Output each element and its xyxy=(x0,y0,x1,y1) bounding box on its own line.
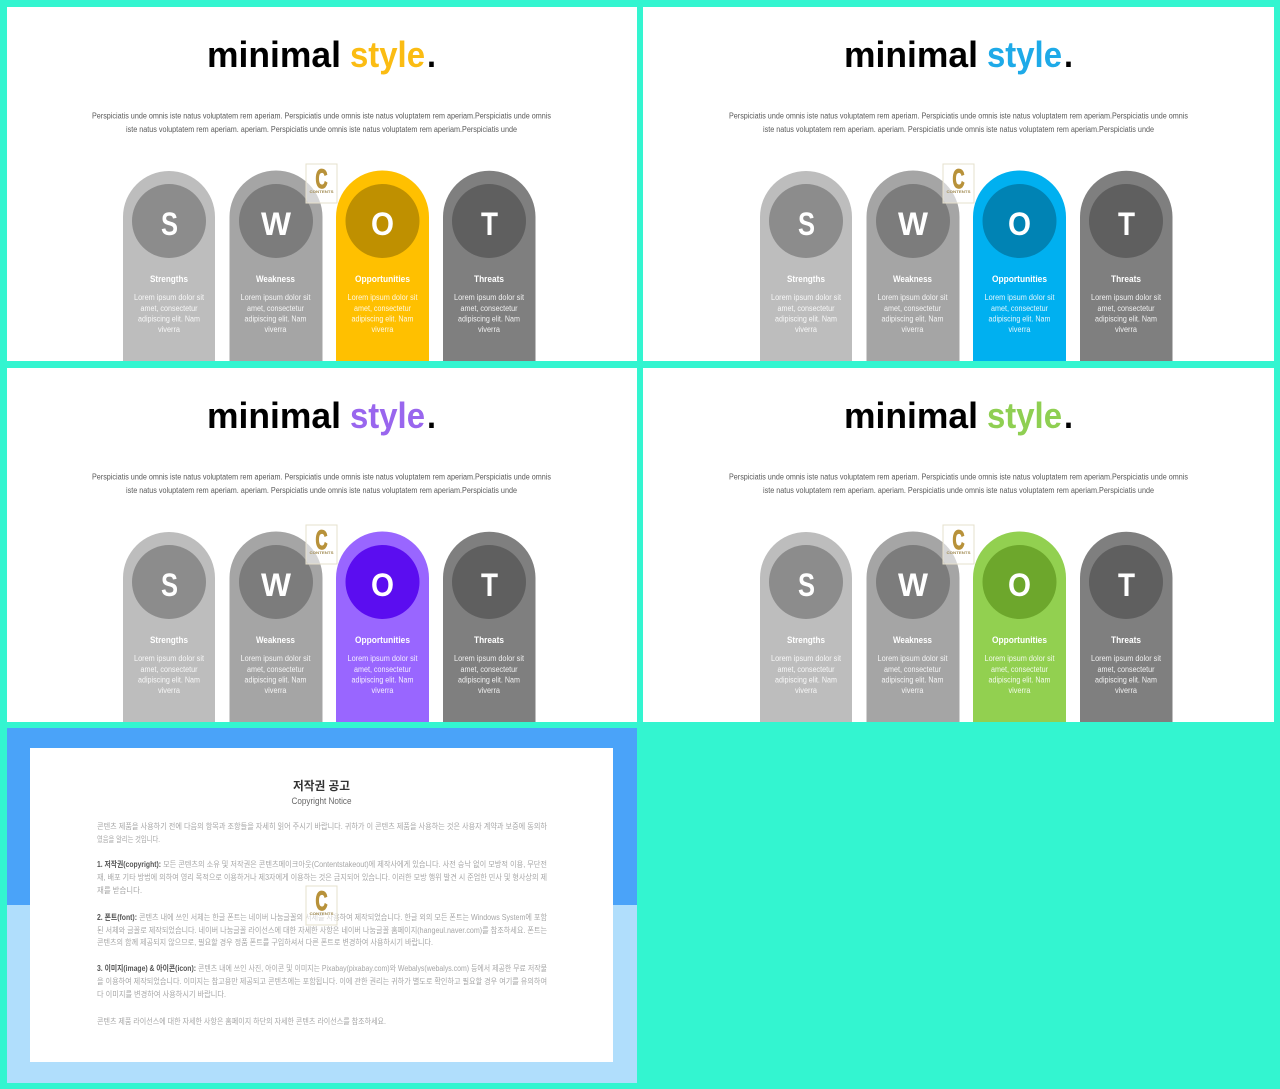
card: Opportunities: Lorem ipsum dolor sit xyxy=(348,293,418,302)
card: Opportunities xyxy=(336,532,429,722)
title: . xyxy=(427,34,436,75)
card: Weakness: W xyxy=(261,567,292,603)
card: Strengths: S xyxy=(161,206,178,242)
card: Opportunities: amet, consectetur xyxy=(354,304,411,313)
card: Opportunities: Lorem ipsum dolor sit xyxy=(984,654,1055,663)
card: Strengths: viverra xyxy=(158,686,180,695)
panel: yellow SWOT slide xyxy=(7,7,637,361)
watermark logo: C xyxy=(316,886,328,916)
text block: introduction: 콘텐츠 제품을 사용하기 전에 다음의 항목과 조항들을 자세히 읽어 주시기 바랍니다. 귀하가 이 콘텐츠 제품을 사용하는 것은 사용자 계약과 보증에 동의하 xyxy=(97,821,548,831)
card: Weakness: Lorem ipsum dolor sit xyxy=(240,654,311,663)
card: Threats: Lorem ipsum dolor sit xyxy=(454,654,525,663)
card: Strengths: Lorem ipsum dolor sit xyxy=(771,654,842,663)
card: Opportunities: viverra xyxy=(1008,325,1031,334)
text block: copyright clause: 재, 배포 기타 방법에 의하여 영리 목적으로 이용하거나 제3자에게 이용하는 것은 금지되어 있습니다. 이러한 모방 행위 발견 시 준엄한 민사 및 형사상의 제 xyxy=(97,872,547,882)
text block: image and icon clause: 을 이용하여 제작되었습니다. 이미지는 참고용만 제공되고 콘텐츠에는 포함됩니다. 이에 관한 권리는 귀하가 별도로 확인하고 필요할 경우 여기를 유의하여 xyxy=(97,976,547,986)
card: Opportunities: Opportunities xyxy=(355,274,410,284)
card: Weakness: W xyxy=(898,567,929,603)
text block: introduction xyxy=(97,821,548,844)
card: Strengths xyxy=(760,532,852,722)
card: Strengths: amet, consectetur xyxy=(778,304,835,313)
intro text: iste natus voluptatem rem aperiam. aperiam. Perspiciatis unde omnis iste natus voluptatem rem aperiam.Perspiciatis unde xyxy=(763,486,1154,495)
card: Strengths: S xyxy=(798,206,815,242)
panel: blue SWOT slide xyxy=(643,7,1274,361)
intro text xyxy=(92,112,551,134)
card: Opportunities: Lorem ipsum dolor sit xyxy=(984,293,1055,302)
card: Weakness: Weakness xyxy=(893,274,932,284)
intro text xyxy=(729,472,1188,495)
card: Opportunities: O xyxy=(371,567,394,603)
title: . xyxy=(427,395,436,436)
title: . xyxy=(1064,34,1073,75)
text block: copyright clause: 모든 콘텐츠의 소유 및 저작권은 콘텐츠메이크아웃(Contentstakeout)에 제작사에게 있습니다. 사전 승낙 없이 모방적 이용, 무단전 xyxy=(163,859,547,869)
card: Weakness: viverra xyxy=(264,686,287,695)
panel: green SWOT slide xyxy=(643,368,1274,722)
card: Opportunities: amet, consectetur xyxy=(354,665,411,674)
card: Threats: T xyxy=(1118,206,1135,242)
card: Weakness: W xyxy=(261,206,292,242)
text block: license note: 콘텐츠 제품 라이선스에 대한 자세한 사항은 홈페이지 하단의 자세한 콘텐츠 라이선스를 참조하세요. xyxy=(97,1016,386,1026)
card: Strengths: Lorem ipsum dolor sit xyxy=(134,293,205,302)
card: Strengths: adipiscing elit. Nam xyxy=(775,676,837,684)
card: Strengths xyxy=(760,171,852,361)
card: Weakness: Weakness xyxy=(256,274,295,284)
card: Weakness xyxy=(866,532,960,722)
intro text xyxy=(92,472,551,495)
title: minimal xyxy=(207,395,341,436)
card: Threats: Threats xyxy=(1111,274,1141,284)
card: Threats: Threats xyxy=(1111,635,1141,645)
watermark logo xyxy=(306,525,337,564)
card: Weakness: adipiscing elit. Nam xyxy=(244,314,307,324)
watermark logo: CONTENTS xyxy=(946,550,971,555)
card: Strengths: viverra xyxy=(795,686,817,695)
card: Threats: Lorem ipsum dolor sit xyxy=(454,293,525,302)
heading: copyright notice xyxy=(292,778,352,806)
title: minimal xyxy=(207,34,341,75)
text block: font clause: 2. 폰트(font): xyxy=(97,913,137,922)
card: Opportunities: adipiscing elit. Nam xyxy=(352,314,414,324)
intro text: Perspiciatis unde omnis iste natus voluptatem rem aperiam. Perspiciatis unde omnis iste natus voluptatem rem aperiam.Perspiciatis unde omnis xyxy=(92,472,551,482)
title: minimal xyxy=(844,34,978,75)
watermark logo: CONTENTS xyxy=(946,189,971,194)
card: Weakness: adipiscing elit. Nam xyxy=(882,676,944,684)
text block: font clause xyxy=(97,912,548,947)
card: Strengths: amet, consectetur xyxy=(778,665,835,674)
card: Threats: viverra xyxy=(1115,686,1137,695)
text block: image and icon clause: 콘텐츠 내에 쓰인 사진, 아이콘 및 이미지는 Pixabay(pixabay.com)와 Webalys(webalys.com) 등에서 제공한 무료 저작물 xyxy=(198,963,547,973)
card: Weakness xyxy=(230,170,322,361)
text block: copyright clause: 1. 저작권(copyright): xyxy=(97,859,161,869)
title: style xyxy=(987,395,1062,436)
card: Strengths: Strengths xyxy=(787,274,825,284)
card: Weakness: W xyxy=(898,206,929,242)
card: Strengths: adipiscing elit. Nam xyxy=(138,314,200,324)
card: Opportunities: Opportunities xyxy=(355,635,410,645)
card: Threats xyxy=(443,532,536,722)
watermark logo xyxy=(306,886,337,925)
card: Weakness: amet, consectetur xyxy=(247,665,304,674)
card: Weakness: viverra xyxy=(902,686,924,695)
card: Opportunities xyxy=(336,170,429,361)
card: Strengths: Strengths xyxy=(150,635,188,645)
card: Threats: Lorem ipsum dolor sit xyxy=(1091,293,1162,302)
card: Strengths: viverra xyxy=(158,325,180,334)
card: Threats: amet, consectetur xyxy=(460,304,518,313)
card: Threats: T xyxy=(481,206,498,242)
card: Strengths: Strengths xyxy=(787,635,825,645)
card: Strengths xyxy=(123,532,215,722)
card: Threats: adipiscing elit. Nam xyxy=(458,314,520,324)
card: Opportunities xyxy=(973,532,1066,722)
card: Threats: adipiscing elit. Nam xyxy=(1095,676,1157,684)
card: Threats: Threats xyxy=(474,635,504,645)
card: Strengths xyxy=(123,171,215,361)
card: Strengths: S xyxy=(798,567,815,603)
card: Opportunities: viverra xyxy=(372,686,394,695)
card: Weakness: adipiscing elit. Nam xyxy=(244,676,307,684)
watermark logo: CONTENTS xyxy=(310,550,334,555)
intro text xyxy=(729,112,1188,134)
card: Weakness: viverra xyxy=(902,325,924,334)
card: Strengths: Lorem ipsum dolor sit xyxy=(771,293,842,302)
card: Threats: adipiscing elit. Nam xyxy=(1095,314,1157,324)
title xyxy=(207,395,436,436)
card: Opportunities xyxy=(973,170,1066,361)
watermark logo: C xyxy=(316,164,328,194)
watermark logo xyxy=(306,164,337,203)
card: Threats xyxy=(443,171,536,361)
card: Opportunities: Opportunities xyxy=(992,274,1047,284)
card: Strengths: S xyxy=(161,567,178,603)
watermark logo: C xyxy=(316,525,328,555)
card: Weakness: adipiscing elit. Nam xyxy=(882,314,944,324)
card: Strengths: viverra xyxy=(795,325,817,334)
card: Threats: viverra xyxy=(1115,325,1137,334)
panel: purple SWOT slide xyxy=(7,368,637,722)
panel: copyright notice xyxy=(7,728,637,1083)
card: Opportunities: O xyxy=(371,206,394,242)
card: Opportunities: viverra xyxy=(372,325,394,334)
watermark logo: CONTENTS xyxy=(310,189,334,194)
title: style xyxy=(350,395,425,436)
card: Weakness: Weakness xyxy=(256,635,295,645)
text block: image and icon clause: 3. 이미지(image) & 아이콘(icon): xyxy=(97,963,196,973)
watermark logo: CONTENTS xyxy=(310,911,334,916)
intro text: Perspiciatis unde omnis iste natus voluptatem rem aperiam. Perspiciatis unde omnis iste natus voluptatem rem aperiam.Perspiciatis unde omnis xyxy=(92,112,551,120)
card: Weakness: Lorem ipsum dolor sit xyxy=(878,654,948,663)
card: Threats xyxy=(1080,532,1172,722)
text block: introduction: 였음을 알리는 것입니다. xyxy=(97,834,160,844)
intro text: Perspiciatis unde omnis iste natus voluptatem rem aperiam. Perspiciatis unde omnis iste natus voluptatem rem aperiam.Perspiciatis unde omnis xyxy=(729,112,1188,120)
text block: font clause: 콘텐츠의 함께 제공되지 않으므로, 필요할 경우 정품 폰트를 구입하셔서 다른 폰트로 변경하여 사용하시기 바랍니다. xyxy=(97,937,433,947)
text block: font clause: 콘텐츠 내에 쓰인 서체는 한글 폰트는 네이버 나눔글꼴의 서체를 사용하여 제작되었습니다. 한글 외의 모든 폰트는 Windows System에 포함 xyxy=(139,912,548,922)
card: Strengths: amet, consectetur xyxy=(140,665,198,674)
card: Strengths: Lorem ipsum dolor sit xyxy=(134,654,205,663)
card: Weakness xyxy=(866,170,960,361)
intro text: iste natus voluptatem rem aperiam. aperiam. Perspiciatis unde omnis iste natus voluptatem rem aperiam.Perspiciatis unde xyxy=(126,486,517,495)
card: Weakness: viverra xyxy=(264,325,287,334)
card: Opportunities: amet, consectetur xyxy=(991,304,1048,313)
card: Strengths: Strengths xyxy=(150,274,188,284)
heading: copyright notice: 저작권 공고 xyxy=(293,778,350,793)
card: Opportunities: O xyxy=(1008,567,1031,603)
text block: copyright clause: 재를 받습니다. xyxy=(97,885,142,895)
title xyxy=(207,34,436,75)
card: Threats: adipiscing elit. Nam xyxy=(458,676,520,684)
text block: image and icon clause xyxy=(97,963,547,999)
card: Threats: T xyxy=(1118,567,1135,603)
card: Opportunities: amet, consectetur xyxy=(991,665,1048,674)
watermark logo: C xyxy=(952,525,964,555)
card: Threats: T xyxy=(481,567,498,603)
title: style xyxy=(350,34,425,75)
card: Threats: amet, consectetur xyxy=(1098,304,1155,313)
title: style xyxy=(987,34,1062,75)
watermark logo: C xyxy=(952,164,964,194)
watermark logo xyxy=(943,525,974,564)
card: Threats xyxy=(1080,171,1172,361)
card: Strengths: amet, consectetur xyxy=(140,304,198,313)
card: Opportunities: viverra xyxy=(1008,686,1031,695)
title xyxy=(844,395,1073,436)
card: Weakness: amet, consectetur xyxy=(884,304,941,313)
intro text: iste natus voluptatem rem aperiam. aperiam. Perspiciatis unde omnis iste natus voluptatem rem aperiam.Perspiciatis unde xyxy=(126,125,517,134)
heading: copyright notice: Copyright Notice xyxy=(292,796,352,806)
card: Weakness: Lorem ipsum dolor sit xyxy=(878,293,948,302)
card: Threats: viverra xyxy=(478,686,500,695)
card: Opportunities: Lorem ipsum dolor sit xyxy=(348,654,418,663)
card: Strengths: adipiscing elit. Nam xyxy=(775,314,837,324)
watermark logo xyxy=(943,164,974,203)
card: Threats: Lorem ipsum dolor sit xyxy=(1091,654,1162,663)
card: Strengths: adipiscing elit. Nam xyxy=(138,676,200,684)
card: Threats: amet, consectetur xyxy=(460,665,518,674)
card: Threats: Threats xyxy=(474,274,504,284)
card: Opportunities: adipiscing elit. Nam xyxy=(352,676,414,684)
card: Threats: amet, consectetur xyxy=(1098,665,1155,674)
title xyxy=(844,34,1073,75)
text block: image and icon clause: 다 이미지를 변경하여 사용하시기 바랍니다. xyxy=(97,989,226,999)
card: Threats: viverra xyxy=(478,325,500,334)
card: Weakness: amet, consectetur xyxy=(884,665,941,674)
card: Opportunities: adipiscing elit. Nam xyxy=(988,676,1051,684)
text block: font clause: 된 서체와 글꼴로 제작되었습니다. 네이버 나눔글꼴 라이선스에 대한 자세한 사항은 네이버 나눔글꼴 홈페이지(hangeul.naver.com)를 참조하세요. 폰트는 xyxy=(97,925,547,935)
text block: copyright clause xyxy=(97,859,547,895)
card: Weakness: Lorem ipsum dolor sit xyxy=(240,293,311,302)
card: Opportunities: Opportunities xyxy=(992,635,1047,645)
card: Opportunities: adipiscing elit. Nam xyxy=(988,314,1051,324)
card: Opportunities: O xyxy=(1008,206,1031,242)
card: Weakness: Weakness xyxy=(893,635,932,645)
intro text: Perspiciatis unde omnis iste natus voluptatem rem aperiam. Perspiciatis unde omnis iste natus voluptatem rem aperiam.Perspiciatis unde omnis xyxy=(729,472,1188,482)
card: Weakness xyxy=(230,532,322,722)
intro text: iste natus voluptatem rem aperiam. aperiam. Perspiciatis unde omnis iste natus voluptatem rem aperiam.Perspiciatis unde xyxy=(763,125,1154,134)
card: Weakness: amet, consectetur xyxy=(247,304,304,313)
title: minimal xyxy=(844,395,978,436)
title: . xyxy=(1064,395,1073,436)
